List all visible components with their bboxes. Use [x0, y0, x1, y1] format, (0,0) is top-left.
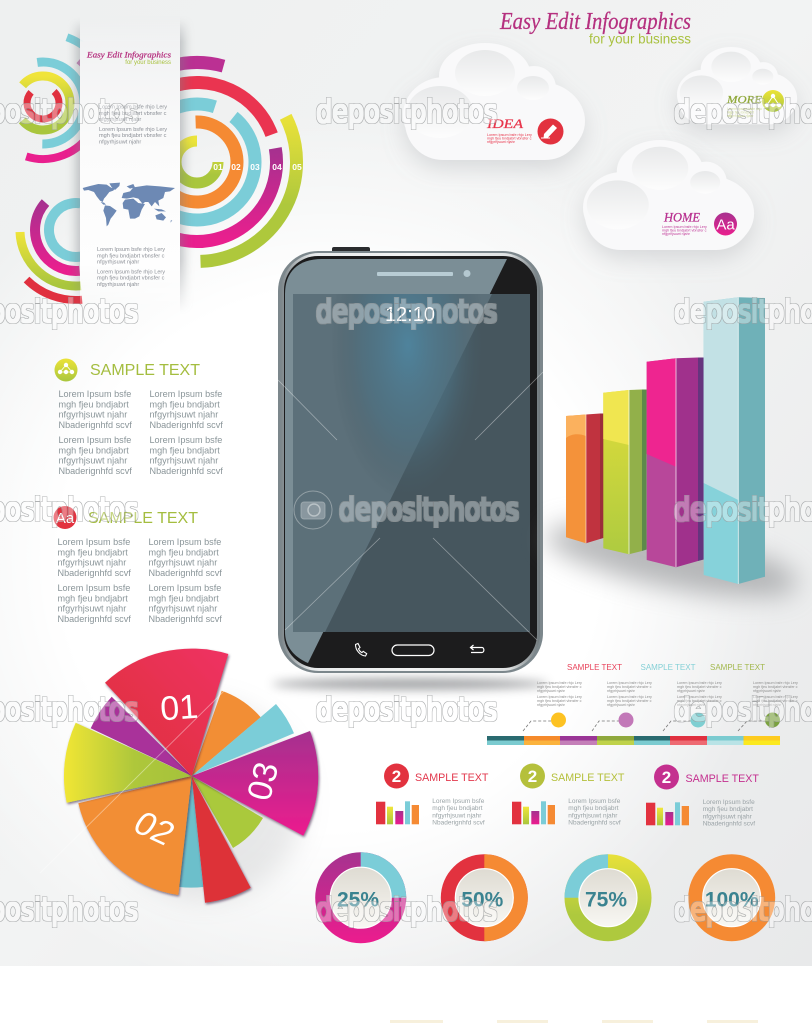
timeline small text: Lorem Ipsum bsfe rhjo Lery — [537, 695, 582, 699]
donut 50% — [441, 854, 528, 941]
timeline markers — [523, 712, 780, 731]
timeline small text: Lorem Ipsum bsfe rhjo Lery — [753, 681, 798, 685]
timeline headings: SAMPLE TEXT — [567, 663, 622, 672]
strip title — [86, 50, 172, 66]
title: for your business — [589, 32, 691, 46]
donut 75% — [564, 854, 652, 941]
strip text bottom: Lorem Ipsum bsfe rhjo Lery — [97, 270, 165, 276]
text block: sample text 2: Nbaderignhfd scvf — [148, 568, 222, 578]
bar 4 teal — [704, 297, 765, 584]
stat block: green: Nbaderignhfd scvf — [568, 820, 621, 826]
donut 100% — [688, 854, 775, 941]
text block: sample text 1: Lorem Ipsum bsfe — [150, 389, 222, 399]
pie chart: 02 — [126, 805, 182, 853]
text block: sample text 1: Nbaderignhfd scvf — [150, 466, 223, 476]
timeline small text: mgh fjeu bndjabrt vbnsfer c — [677, 685, 722, 689]
strip text top: Lorem Ipsum bsfe rhjo Lery — [99, 127, 167, 133]
timeline small text: mgh fjeu bndjabrt vbnsfer c — [607, 699, 652, 703]
timeline small text: mgh fjeu bndjabrt vbnsfer c — [537, 699, 582, 703]
3d bar chart — [541, 297, 803, 612]
text block: sample text 1: mgh fjeu bndjabrt — [150, 400, 220, 410]
mini bars — [512, 801, 555, 824]
text block: sample text 2: Nbaderignhfd scvf — [58, 614, 131, 624]
timeline bar — [487, 736, 780, 745]
cloud: home: mgh fjeu bndjabrt vbnsfer c — [662, 228, 707, 232]
stat block: magenta: nfgyrhjsuwt njahr — [703, 813, 753, 820]
cloud: idea: nfgyrhjsuwt njahr — [487, 140, 516, 144]
cloud: more: MORE — [726, 94, 762, 106]
text block: sample text 2: mgh fjeu bndjabrt — [58, 594, 128, 604]
bar 2 yellow green — [603, 390, 647, 554]
text block: sample text 1: Lorem Ipsum bsfe — [150, 435, 222, 445]
nav: back icon — [470, 645, 484, 652]
stat block: red: Nbaderignhfd scvf — [432, 820, 485, 826]
concentric rings: bottom left — [0, 154, 152, 306]
stat block: red: 2 — [392, 767, 401, 786]
strip text top: mgh fjeu bndjabrt vbnsfer c — [99, 133, 167, 139]
text block: sample text 1: Lorem Ipsum bsfe — [58, 435, 131, 445]
timeline small text: nfgyrhjsuwt njahr — [677, 689, 706, 693]
text block: sample text 2: Lorem Ipsum bsfe — [148, 537, 221, 547]
stat block: green: SAMPLE TEXT — [551, 772, 625, 784]
stat block: red: SAMPLE TEXT — [415, 772, 489, 784]
glass reflection — [285, 259, 507, 663]
strip text bottom: mgh fjeu bndjabrt vbnsfer c — [97, 253, 165, 259]
stat block: magenta: 2 — [662, 768, 671, 787]
concentric rings chart 01-05: 01 — [213, 162, 223, 172]
text block: sample text 1: nfgyrhjsuwt njahr — [58, 410, 127, 420]
smartphone — [278, 247, 543, 673]
text block: sample text 1: nfgyrhjsuwt njahr — [58, 456, 127, 466]
text block: sample text 2: Lorem Ipsum bsfe — [148, 583, 221, 593]
concentric rings chart 01-05: 05 — [292, 162, 302, 172]
strip text top: mgh fjeu bndjabrt vbnsfer c — [99, 111, 167, 117]
icon: text Aa: Aa — [56, 510, 75, 527]
text block: sample text 1 — [54, 358, 223, 476]
watermarks: depositphotos — [316, 692, 497, 728]
title — [499, 9, 691, 46]
text block: sample text 2: Lorem Ipsum bsfe — [58, 537, 130, 547]
nav: phone icon — [355, 644, 367, 656]
stat block: magenta: Lorem Ipsum bsfe — [703, 799, 755, 806]
icon: pencil — [538, 118, 564, 144]
timeline small text — [537, 681, 798, 707]
stat block: red: Lorem Ipsum bsfe — [432, 798, 485, 805]
text block: sample text 1: Nbaderignhfd scvf — [150, 420, 223, 430]
timeline small text: mgh fjeu bndjabrt vbnsfer c — [677, 699, 722, 703]
donut 100%: 100% — [705, 889, 759, 912]
icon: text Aa — [714, 212, 737, 236]
watermarks: depositphotos — [316, 294, 497, 330]
pie chart — [40, 649, 318, 903]
stat block: green: nfgyrhjsuwt njahr — [568, 812, 618, 819]
timeline headings — [567, 663, 765, 672]
text block: sample text 2: nfgyrhjsuwt njahr — [58, 604, 126, 614]
stat block: red: mgh fjeu bndjabrt — [432, 805, 483, 812]
strip text bottom: mgh fjeu bndjabrt vbnsfer c — [97, 276, 165, 282]
nav: home button — [392, 645, 434, 656]
pie labels: 01 — [159, 688, 199, 728]
stat block: green: Lorem Ipsum bsfe — [568, 798, 621, 805]
strip title: Easy Edit Infographics — [86, 50, 172, 60]
timeline small text: Lorem Ipsum bsfe rhjo Lery — [607, 695, 652, 699]
light rays — [278, 372, 543, 640]
donut 50%: 50% — [461, 889, 504, 912]
side button — [332, 247, 370, 253]
stat block: green: 2 — [528, 767, 537, 786]
donut 25%: 25% — [337, 889, 379, 912]
icon: network — [54, 358, 78, 382]
stat block: red — [376, 764, 489, 826]
timeline small text: Lorem Ipsum bsfe rhjo Lery — [607, 681, 652, 685]
pie chart: 03 — [240, 758, 286, 804]
icon: network — [762, 90, 784, 112]
cloud: home: Lorem Ipsum bsfe rhjo Lery — [662, 225, 707, 229]
strip text bottom: nfgyrhjsuwt njahr — [97, 282, 139, 288]
cloud: idea: IDEA — [486, 116, 523, 131]
cloud: home: nfgyrhjsuwt njahr — [662, 232, 691, 236]
donut 25% — [315, 852, 406, 943]
bar 3 magenta — [647, 358, 704, 567]
concentric rings chart 01-05: 02 — [231, 162, 241, 172]
concentric rings chart 01-05 — [75, 40, 319, 284]
cloud: more: Lorem Ipsum bsfe rhjo — [727, 107, 762, 111]
bar shadow — [541, 508, 803, 612]
timeline headings: SAMPLE TEXT — [640, 663, 696, 672]
clock: 12:10 — [385, 304, 435, 326]
cloud: home: HOME — [663, 210, 700, 224]
strip text bottom: Lorem Ipsum bsfe rhjo Lery — [97, 247, 165, 253]
timeline small text: mgh fjeu bndjabrt vbnsfer c — [753, 699, 798, 703]
speaker — [377, 272, 453, 276]
cloud: idea — [403, 43, 585, 160]
title: Easy Edit Infographics — [499, 9, 691, 35]
watermarks: depositphotos — [339, 492, 519, 528]
watermarks: depositphotos — [316, 94, 497, 130]
timeline small text: Lorem Ipsum bsfe rhjo Lery — [677, 681, 722, 685]
text block: sample text 2: nfgyrhjsuwt njahr — [148, 558, 217, 568]
concentric rings chart 01-05: 04 — [272, 162, 282, 172]
timeline — [487, 663, 798, 745]
concentric rings chart 01-05: 03 — [250, 162, 260, 172]
timeline headings: SAMPLE TEXT — [710, 663, 765, 672]
stat block: magenta — [646, 764, 759, 828]
screen — [293, 294, 530, 632]
strip title: for your business — [125, 60, 171, 66]
strip text top: nfgyrhjsuwt njahr — [99, 140, 141, 146]
text block: sample text 1: mgh fjeu bndjabrt — [150, 446, 220, 456]
strip text top: nfgyrhjsuwt njahr — [99, 117, 141, 123]
text block: sample text 2: mgh fjeu bndjabrt — [148, 594, 219, 604]
timeline small text: nfgyrhjsuwt njahr — [753, 703, 782, 707]
text block: sample text 1: nfgyrhjsuwt njahr — [150, 456, 218, 466]
strip text bottom: nfgyrhjsuwt njahr — [97, 260, 139, 266]
timeline small text: Lorem Ipsum bsfe rhjo Lery — [677, 695, 722, 699]
pie shadow — [105, 700, 305, 900]
text block: sample text 2: Nbaderignhfd scvf — [148, 614, 222, 624]
camera — [464, 270, 470, 277]
timeline small text: mgh fjeu bndjabrt vbnsfer c — [607, 685, 652, 689]
phone shadow — [272, 678, 548, 690]
timeline small text: nfgyrhjsuwt njahr — [537, 689, 566, 693]
text block: sample text 1: Nbaderignhfd scvf — [58, 466, 132, 476]
text block: sample text 2: mgh fjeu bndjabrt — [58, 548, 128, 558]
timeline small text: mgh fjeu bndjabrt vbnsfer c — [753, 685, 798, 689]
icon: text Aa — [54, 506, 76, 529]
text block: sample text 1: nfgyrhjsuwt njahr — [150, 410, 218, 420]
cloud: more: mgh fjeu bndjabrt — [727, 110, 754, 114]
stat block: magenta: SAMPLE TEXT — [686, 773, 759, 785]
text block: sample text 2: nfgyrhjsuwt njahr — [148, 604, 217, 614]
text block: sample text 2 — [54, 506, 222, 624]
timeline small text: Lorem Ipsum bsfe rhjo Lery — [753, 695, 798, 699]
stat block: magenta: mgh fjeu bndjabrt — [703, 806, 753, 813]
mini bars — [646, 802, 689, 825]
text block: sample text 2: Nbaderignhfd scvf — [58, 568, 131, 578]
text block: sample text 2: Lorem Ipsum bsfe — [58, 583, 130, 593]
timeline small text: nfgyrhjsuwt njahr — [607, 703, 636, 707]
cloud: more — [677, 47, 797, 124]
stat block: magenta: Nbaderignhfd scvf — [703, 820, 755, 828]
donut 75%: 75% — [585, 889, 627, 912]
icon: text Aa: Aa — [716, 216, 735, 234]
mini bars — [376, 801, 419, 824]
text block: sample text 1: mgh fjeu bndjabrt — [58, 446, 129, 456]
text block: sample text 1: Nbaderignhfd scvf — [58, 420, 132, 430]
world map — [83, 183, 175, 226]
text block: sample text 1: Lorem Ipsum bsfe — [58, 389, 131, 399]
watermarks: depositphotos — [316, 892, 497, 928]
text block: sample text 2: nfgyrhjsuwt njahr — [58, 558, 126, 568]
timeline small text: nfgyrhjsuwt njahr — [607, 689, 636, 693]
cloud: more: nfgyrhjsuwt njahr — [727, 114, 754, 118]
timeline small text: nfgyrhjsuwt njahr — [537, 703, 566, 707]
stat block: red: nfgyrhjsuwt njahr — [432, 812, 482, 819]
timeline small text: Lorem Ipsum bsfe rhjo Lery — [537, 681, 582, 685]
panel: vertical paper strip — [76, 15, 184, 315]
text block: sample text 2: SAMPLE TEXT — [88, 510, 198, 527]
stat block: green: mgh fjeu bndjabrt — [568, 805, 619, 812]
bar 1 orange — [566, 414, 604, 543]
cloud: home — [583, 140, 754, 250]
stat block: green — [512, 764, 625, 826]
concentric rings: top left — [0, 13, 133, 193]
timeline small text: nfgyrhjsuwt njahr — [753, 689, 782, 693]
timeline small text: nfgyrhjsuwt njahr — [677, 703, 706, 707]
text block: sample text 1: SAMPLE TEXT — [90, 362, 200, 379]
text block: sample text 1: mgh fjeu bndjabrt — [58, 400, 129, 410]
cloud: idea: mgh fjeu bndjabrt vbnsfer c — [487, 136, 532, 140]
strip text top: Lorem Ipsum bsfe rhjo Lery — [99, 104, 167, 110]
cloud: idea: Lorem Ipsum bsfe rhjo Lery — [487, 133, 532, 137]
text block: sample text 2: mgh fjeu bndjabrt — [148, 548, 219, 558]
timeline small text: mgh fjeu bndjabrt vbnsfer c — [537, 685, 582, 689]
